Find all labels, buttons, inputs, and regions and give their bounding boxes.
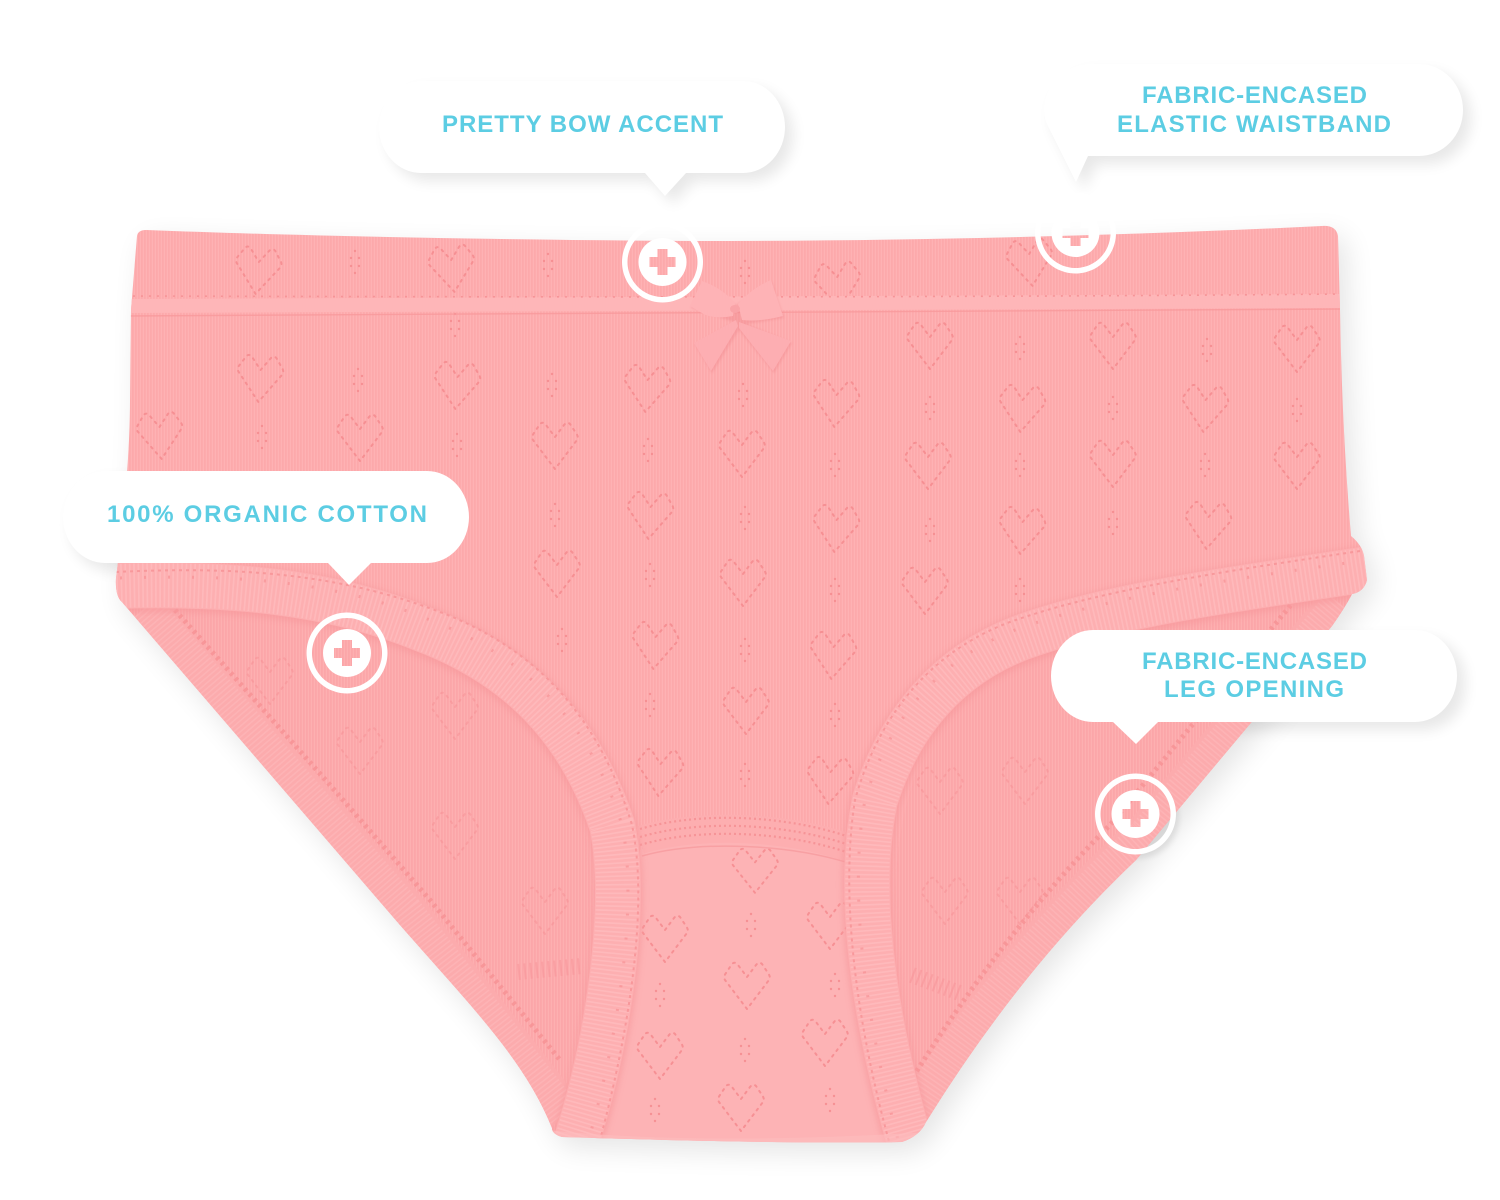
- callout: fabric-encased leg opening: [1051, 630, 1457, 744]
- crotch bottom edge: [553, 1130, 915, 1142]
- callout: pretty bow accent: [379, 81, 785, 196]
- callout: pretty bow accent: PRETTY BOW ACCENT: [442, 111, 723, 138]
- callout: fabric-encased leg opening: LEG OPENING: [1164, 676, 1344, 703]
- left leg band: [112, 570, 638, 1147]
- bow accent: [690, 280, 792, 373]
- marker: leg opening: [1095, 774, 1176, 855]
- garment: pink pointelle underwear: [100, 215, 1390, 1155]
- left leg diagonal hem: [140, 610, 560, 1120]
- callout: fabric-encased elastic waistband: FABRIC-ENCASED: [1142, 82, 1367, 109]
- bow loops: [690, 280, 783, 320]
- marker: bow: [622, 222, 703, 302]
- marker: waistband: [1035, 192, 1116, 274]
- callout: fabric-encased leg opening: FABRIC-ENCASED: [1142, 648, 1367, 675]
- right leg panel: [927, 594, 1352, 1120]
- marker: cotton: [307, 612, 388, 694]
- fabric base: [100, 215, 1390, 1155]
- crotch corner seams: [518, 966, 962, 994]
- gusset panel: [590, 839, 893, 1145]
- callout: fabric-encased elastic waistband: [1044, 64, 1463, 182]
- bow knot: [730, 305, 740, 313]
- callout: 100% organic cotton: [63, 471, 469, 585]
- bow tails: [694, 320, 791, 371]
- callout: fabric-encased elastic waistband: ELASTIC WAISTBAND: [1117, 111, 1391, 138]
- right leg diagonal hem: [905, 600, 1345, 1120]
- gusset seam: [640, 818, 855, 864]
- bow shadow: [691, 282, 792, 373]
- callout: 100% organic cotton: 100% ORGANIC COTTON: [107, 501, 427, 528]
- right leg band: [849, 551, 1375, 1152]
- left leg panel: [119, 598, 554, 1132]
- waistband seam: [125, 294, 1345, 316]
- heart pattern: [136, 237, 1320, 1131]
